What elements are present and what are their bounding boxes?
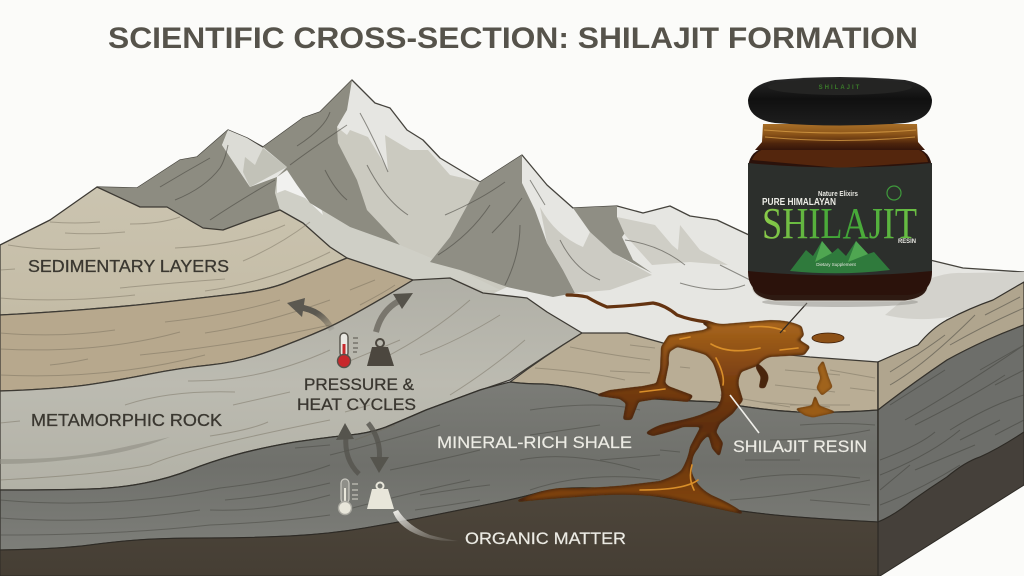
layer: tan right of resin bbox=[510, 333, 878, 412]
pressure and heat cycles: upper icons and arrows bbox=[287, 293, 413, 368]
strata lines bbox=[0, 217, 875, 480]
foot snow highlight bbox=[277, 168, 323, 215]
arrow: up-left bbox=[287, 298, 332, 330]
main peak light body bbox=[337, 127, 507, 295]
jar neck glass ridge bbox=[764, 130, 916, 140]
layer: tan sedimentary bbox=[0, 258, 413, 391]
label: shilajit resin: SHILAJIT RESIN bbox=[733, 437, 867, 456]
label green mountains bbox=[790, 241, 890, 273]
mountain crease lines bbox=[160, 112, 760, 290]
label product name: SHILAJIT bbox=[762, 199, 917, 248]
snow surface and mountain silhouette bbox=[97, 80, 1024, 420]
product jar bbox=[748, 77, 932, 307]
jar lid top bbox=[768, 79, 912, 95]
jar neck amber bbox=[755, 124, 925, 150]
left peak snow bbox=[222, 130, 287, 187]
jar body bbox=[748, 147, 932, 295]
right face: organic layer bbox=[878, 432, 1024, 576]
main peak dark face bbox=[263, 80, 400, 245]
label resin: RESIN bbox=[898, 238, 916, 245]
label dietary: Dietary Supplement bbox=[816, 262, 857, 267]
label subtitle: PURE HIMALAYAN bbox=[762, 197, 836, 208]
icon: pale weight bbox=[367, 482, 394, 509]
resin drip centre bbox=[756, 363, 768, 388]
jar label bbox=[748, 163, 932, 276]
label badge bbox=[887, 186, 901, 200]
mountain range bbox=[97, 80, 1024, 420]
left peak snow shade bbox=[243, 148, 287, 187]
label: organic matter: ORGANIC MATTER bbox=[465, 529, 626, 548]
second peak right body bbox=[540, 207, 652, 293]
lower icons and arrows bbox=[336, 423, 394, 514]
arrow: up bbox=[336, 423, 359, 474]
icon: red thermometer bbox=[338, 333, 358, 368]
main peak foot bbox=[275, 177, 500, 290]
label: pressure & heat cycles bbox=[297, 375, 416, 414]
label: sedimentary layers: SEDIMENTARY LAYERS bbox=[28, 256, 229, 276]
arrow: up-right bbox=[376, 293, 413, 332]
shale strata lines bbox=[0, 405, 875, 535]
line two: HEAT CYCLES bbox=[297, 395, 416, 414]
surface vein bbox=[567, 295, 723, 327]
label mountain highlight bbox=[815, 241, 868, 262]
jar shoulder glow bbox=[752, 148, 928, 168]
snow shadow right bbox=[885, 272, 1024, 319]
label: metamorphic rock: METAMORPHIC ROCK bbox=[31, 410, 222, 430]
title: SCIENTIFIC CROSS-SECTION: SHILAJIT FORMATION bbox=[108, 22, 918, 55]
jar base rim bbox=[752, 285, 928, 301]
resin drip right bbox=[817, 361, 832, 395]
lid green print: SHILAJIT bbox=[819, 85, 861, 91]
jar shadow bbox=[762, 297, 918, 307]
resin highlights bbox=[640, 326, 798, 490]
shilajit resin veins bbox=[518, 295, 844, 513]
layer: metamorphic bbox=[0, 278, 582, 490]
resin puddle bbox=[796, 396, 835, 417]
layer: mineral-rich shale bbox=[0, 382, 878, 550]
metamorphic dark streak bbox=[0, 437, 170, 464]
corner edge bbox=[877, 362, 879, 576]
layer: organic matter bbox=[0, 488, 878, 576]
label brand: Nature Elixirs bbox=[818, 191, 858, 198]
resin body bbox=[518, 321, 809, 513]
label: mineral-rich shale: MINERAL-RICH SHALE bbox=[437, 433, 632, 452]
sedimentary layers: front face bbox=[0, 187, 878, 576]
resin droplet bbox=[812, 333, 844, 343]
icon: dark weight bbox=[367, 339, 394, 366]
pointer: organic matter bbox=[393, 510, 458, 541]
layer: upper sedimentary bbox=[0, 187, 347, 315]
arrow: down bbox=[368, 423, 389, 473]
right face strata lines bbox=[880, 297, 1024, 505]
icon: pale thermometer bbox=[338, 479, 358, 514]
third peak dark face bbox=[573, 206, 652, 273]
right face: tan layer bbox=[878, 282, 1024, 410]
third peak light facets bbox=[617, 217, 728, 265]
left mountain dark face bbox=[97, 130, 280, 230]
pointer line: jar to resin bbox=[780, 303, 807, 333]
second peak dark face bbox=[430, 155, 575, 297]
right face: shale layer bbox=[878, 325, 1024, 522]
pointer line: shilajit resin label bbox=[730, 395, 759, 433]
line one: PRESSURE & bbox=[304, 375, 415, 394]
block right side face bbox=[878, 282, 1024, 576]
jar lid bbox=[748, 77, 932, 126]
